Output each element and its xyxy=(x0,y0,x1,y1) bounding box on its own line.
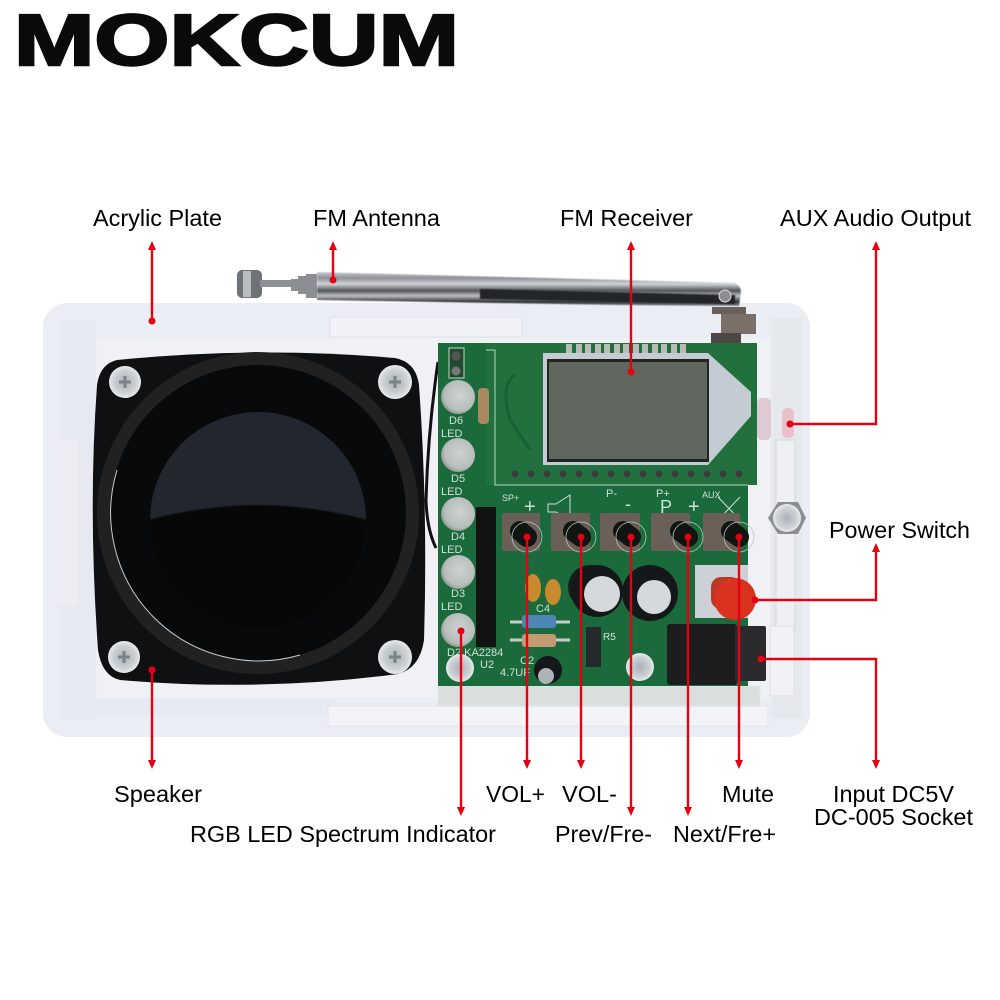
label: AUX Audio Output: AUX Audio Output xyxy=(780,205,972,231)
silkscreen labels: D5 xyxy=(451,473,465,485)
label: Mute: Mute xyxy=(722,781,774,807)
acrylic case xyxy=(43,303,810,737)
AUX jack xyxy=(757,398,794,440)
label: FM Receiver: FM Receiver xyxy=(560,205,693,231)
speaker and mute silkscreen icons xyxy=(548,495,740,520)
label: Prev/Fre-: Prev/Fre- xyxy=(555,821,652,847)
callout line: VOL+ xyxy=(526,537,528,764)
label: RGB LED Spectrum Indicator: RGB LED Spectrum Indicator xyxy=(190,821,496,847)
button caps xyxy=(512,522,754,552)
resistors R5 R4 xyxy=(510,615,570,647)
speaker dome xyxy=(150,412,366,520)
silkscreen labels: SP+ xyxy=(502,493,519,503)
silkscreen labels: R5 xyxy=(603,632,616,643)
side screw xyxy=(768,502,806,534)
tactile switches xyxy=(502,513,740,551)
label: FM Antenna: FM Antenna xyxy=(313,205,440,231)
silkscreen labels: P+ xyxy=(656,488,670,500)
callouts xyxy=(152,248,876,811)
silkscreen labels: D2 KA2284 xyxy=(447,647,503,659)
electrolytic capacitors xyxy=(568,565,678,621)
silkscreen labels: P xyxy=(660,497,672,517)
label: Acrylic Plate: Acrylic Plate xyxy=(93,205,222,231)
speaker wire xyxy=(426,362,438,548)
screws on board xyxy=(446,653,654,682)
callout line: Power Switch xyxy=(755,549,876,600)
label: VOL+: VOL+ xyxy=(486,781,545,807)
silkscreen labels: LED xyxy=(441,601,462,613)
LCD tail xyxy=(543,353,751,465)
screw top right xyxy=(378,365,412,399)
speaker xyxy=(93,352,438,685)
callout line: FM Receiver xyxy=(630,248,632,372)
screw bottom left xyxy=(108,641,140,673)
silkscreen labels: - xyxy=(625,494,631,514)
silkscreen labels: D3 xyxy=(451,588,465,600)
silkscreen labels: D6 xyxy=(449,415,463,427)
LCD screen xyxy=(547,359,709,462)
silkscreen labels: AUX xyxy=(702,490,721,500)
silkscreen labels: C2 xyxy=(520,655,534,667)
callout line: Next/Fre+ xyxy=(687,537,689,811)
silkscreen labels: U2 xyxy=(480,659,494,671)
LCD solder pads xyxy=(512,470,742,478)
callout line: FM Antenna xyxy=(332,248,334,280)
logo: MOKCUM: MOKCUM xyxy=(14,1,459,81)
DC socket xyxy=(667,624,766,685)
speaker plate xyxy=(93,352,425,685)
callout line: Prev/Fre- xyxy=(630,537,632,811)
callout line: Acrylic Plate xyxy=(151,248,153,321)
speaker header xyxy=(449,348,464,378)
screw top left xyxy=(109,366,141,398)
silkscreen labels: LED xyxy=(441,486,462,498)
LCD header pins xyxy=(566,344,686,355)
power switch xyxy=(695,565,756,620)
silkscreen labels: + xyxy=(688,496,700,518)
silkscreen labels: LED xyxy=(441,544,462,556)
label: Power Switch: Power Switch xyxy=(829,517,970,543)
callout line: Input DC5V xyxy=(761,659,876,764)
screw bottom right xyxy=(378,640,412,674)
callout line: Speaker xyxy=(151,670,153,764)
antenna xyxy=(237,270,756,344)
callout line: Mute xyxy=(738,537,740,764)
LEDs xyxy=(441,380,475,647)
label: DC-005 Socket: DC-005 Socket xyxy=(814,804,974,830)
silkscreen labels: LED xyxy=(441,428,462,440)
silkscreen labels xyxy=(441,415,721,679)
label: VOL-: VOL- xyxy=(562,781,617,807)
label: Next/Fre+: Next/Fre+ xyxy=(673,821,776,847)
button stems xyxy=(520,531,739,537)
diode D1 xyxy=(586,627,601,667)
IC socket xyxy=(476,507,496,647)
resistor R6 xyxy=(478,388,489,424)
speaker surround xyxy=(97,352,419,674)
callout line: AUX Audio Output xyxy=(790,248,876,424)
silkscreen labels: + xyxy=(524,496,536,518)
silkscreen labels: P- xyxy=(606,488,617,500)
callout line: RGB LED xyxy=(460,631,462,811)
circuit board xyxy=(438,343,766,686)
silkscreen labels: 4.7UF xyxy=(500,667,530,679)
callout line: VOL- xyxy=(580,537,582,764)
silkscreen labels: D4 xyxy=(451,531,465,543)
label: Input DC5V: Input DC5V xyxy=(833,781,955,807)
callout dots and arrowheads xyxy=(148,241,880,816)
small capacitor C2 xyxy=(534,656,562,684)
label: Speaker: Speaker xyxy=(114,781,202,807)
silkscreen labels: C4 xyxy=(536,603,550,615)
ceramic capacitors xyxy=(525,574,561,605)
